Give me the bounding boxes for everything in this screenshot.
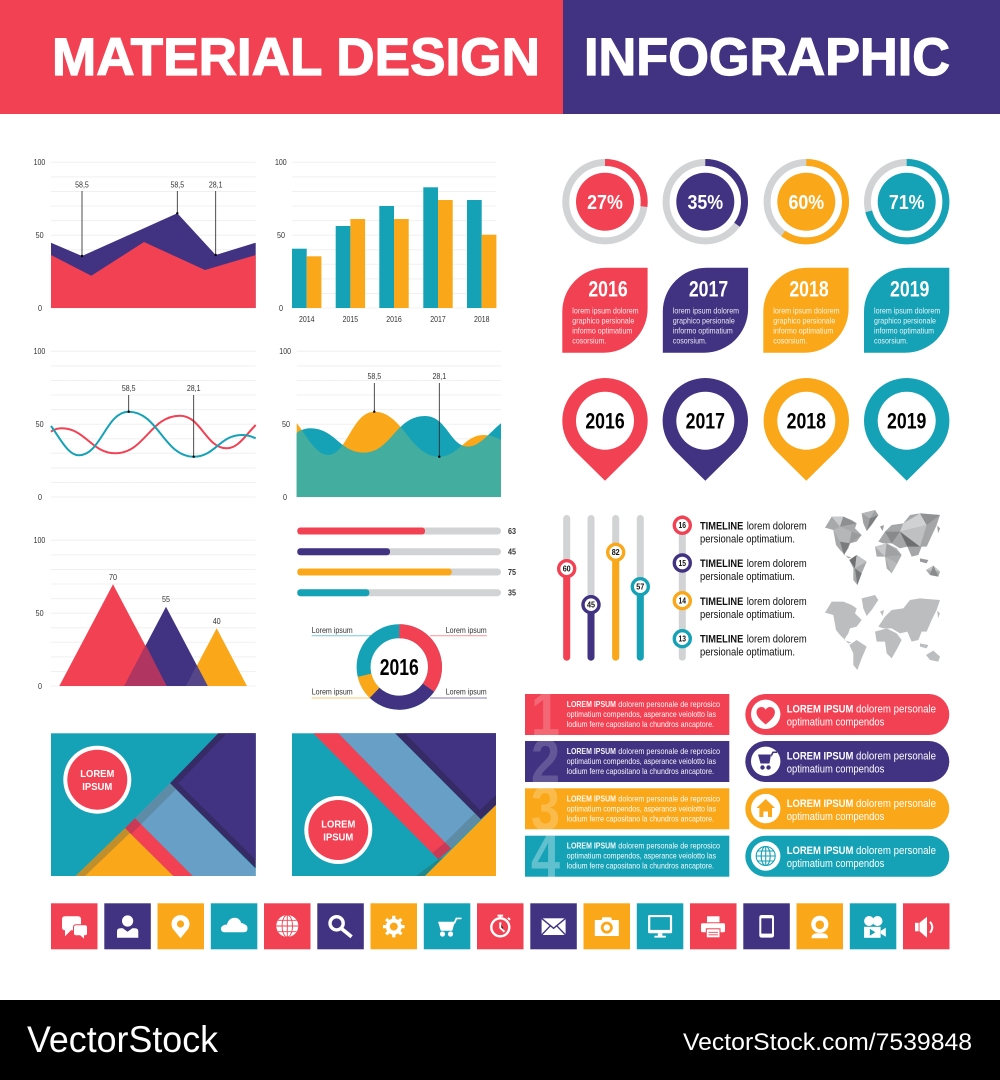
year card 2018: lorem ipsum dolorem xyxy=(773,306,840,316)
timeline list: 14 xyxy=(679,597,687,606)
year card 2019: cosorsium. xyxy=(874,335,908,345)
footer: watermark bar: VectorStock xyxy=(27,1019,218,1060)
timeline list: TIMELINE xyxy=(700,596,743,608)
year card 2016: graphico persionale xyxy=(572,316,635,326)
numbered row 4: optimatium compendos, asperance veiolotto las xyxy=(567,851,716,861)
chart: wave lines: 28,1 xyxy=(187,384,201,393)
year card 2019: lorem ipsum dolorem xyxy=(874,306,940,316)
year card 2016: informo optimatium xyxy=(572,325,632,335)
timeline list: persionale optimatium. xyxy=(700,609,795,621)
icon: house xyxy=(756,799,775,817)
numbered row 4: 4 xyxy=(531,822,560,891)
chart: donut 2016 with callouts: Lorem ipsum xyxy=(446,626,487,635)
chart: grouped bars 2014-2018 xyxy=(275,158,496,324)
timeline list: persionale optimatium. xyxy=(700,571,795,583)
percent ring 60%: 60% xyxy=(788,191,824,214)
year card 2019: graphico persionale xyxy=(874,316,936,326)
banner: material layout one: LOREM xyxy=(80,768,115,780)
chart: horizontal progress bars xyxy=(297,527,516,598)
chart: vertical sliders: 82 xyxy=(612,548,620,557)
map pin 2016 xyxy=(562,378,648,481)
icon: speaker xyxy=(903,903,950,949)
title: material design: MATERIAL DESIGN xyxy=(52,28,540,87)
year card 2018 xyxy=(763,268,849,353)
timeline list: 16 xyxy=(679,521,687,530)
map pin 2016: 2016 xyxy=(585,409,625,434)
chart: overlapping triangles xyxy=(34,536,256,691)
year card 2017: informo optimatium xyxy=(673,325,733,335)
title: infographic: INFOGRAPHIC xyxy=(584,28,950,87)
numbered row 1: lodium ferre capositano la chundros ancaptore. xyxy=(567,719,714,729)
pill: heart: optimatium compendos xyxy=(787,716,885,728)
timeline list: lorem dolorem xyxy=(747,596,807,608)
numbered row 2: 2 xyxy=(531,728,560,796)
year card 2017: cosorsium. xyxy=(673,335,707,345)
icon: globe xyxy=(756,846,775,866)
chart: grouped bars 2014-2018: 2016 xyxy=(386,315,402,324)
timeline list: 13 xyxy=(679,635,687,644)
chart: donut 2016 with callouts: Lorem ipsum xyxy=(312,688,353,697)
numbered row 2: lodium ferre capositano la chundros ancaptore. xyxy=(567,766,714,776)
chart: wave lines: 58,5 xyxy=(122,384,136,393)
icon: camera xyxy=(584,903,630,949)
pill: heart: LOREM IPSUM xyxy=(787,704,853,716)
icon: heart xyxy=(756,707,775,724)
percent ring 71%: 71% xyxy=(889,191,925,214)
pill: cart: dolorem personale xyxy=(856,750,936,762)
icon: user xyxy=(104,903,151,949)
chart: donut 2016 with callouts: Lorem ipsum xyxy=(312,626,353,635)
icon: stopwatch xyxy=(477,903,524,949)
chart: stacked polygon area: 50 xyxy=(36,231,44,240)
chart: donut 2016 with callouts xyxy=(312,617,487,717)
icon: cart xyxy=(758,752,777,770)
year card 2016: cosorsium. xyxy=(572,335,606,345)
chart: stacked polygon area: 0 xyxy=(38,304,42,313)
numbered row 1 xyxy=(525,694,730,735)
chart: stacked polygon area xyxy=(34,158,256,313)
map pin 2017 xyxy=(663,378,748,481)
icon: mail xyxy=(530,903,577,949)
year card 2018: cosorsium. xyxy=(773,335,807,345)
pill: heart xyxy=(745,694,949,735)
year card 2018: informo optimatium xyxy=(773,325,833,335)
chart: overlapping wave areas: 100 xyxy=(279,347,291,356)
year card 2016: 2016 xyxy=(588,276,628,302)
world map: low poly xyxy=(825,510,940,585)
timeline list: lorem dolorem xyxy=(747,558,807,570)
chart: wave lines: 0 xyxy=(38,493,42,502)
timeline list: persionale optimatium. xyxy=(700,647,795,659)
pill: home xyxy=(745,788,949,829)
map pin 2019: 2019 xyxy=(887,409,926,434)
chart: overlapping triangles: 100 xyxy=(34,536,46,545)
chart: stacked polygon area: 58,5 xyxy=(170,180,185,190)
year card 2017 xyxy=(663,268,748,353)
numbered row 2 xyxy=(525,741,730,782)
banner: material layout two: LOREM xyxy=(321,818,356,830)
chart: grouped bars 2014-2018: 100 xyxy=(275,158,287,167)
icon: phone xyxy=(743,903,790,949)
year card 2018: 2018 xyxy=(789,276,829,302)
chart: overlapping triangles: 70 xyxy=(109,573,117,582)
map pin 2017: 2017 xyxy=(686,409,725,434)
chart: grouped bars 2014-2018: 2018 xyxy=(474,315,490,324)
percent ring 35% xyxy=(666,162,744,241)
year card 2018: graphico persionale xyxy=(773,316,836,326)
banner: material layout two: IPSUM xyxy=(323,832,354,844)
icon: search xyxy=(317,903,364,949)
numbered row 1: 1 xyxy=(531,680,560,750)
banner: material layout one: IPSUM xyxy=(82,781,113,793)
icon: printer xyxy=(690,903,736,949)
year card 2017: 2017 xyxy=(689,276,728,302)
footer: watermark bar: VectorStock.com/7539848 xyxy=(683,1029,972,1056)
map pin 2018 xyxy=(764,378,849,481)
chart: overlapping wave areas: 0 xyxy=(283,493,287,502)
numbered row 3 xyxy=(525,788,730,830)
timeline list: TIMELINE xyxy=(700,520,743,532)
year card 2016: lorem ipsum dolorem xyxy=(572,306,639,316)
numbered row 3: optimatium compendos, asperance veiolotto las xyxy=(567,803,716,813)
chart: grouped bars 2014-2018: 2017 xyxy=(430,315,446,324)
numbered row 4 xyxy=(525,836,730,877)
pill: home: LOREM IPSUM xyxy=(787,798,853,810)
pill: heart: dolorem personale xyxy=(856,704,936,716)
chart: wave lines: 50 xyxy=(36,420,44,429)
year card 2017: graphico persionale xyxy=(673,316,735,326)
banner: material layout one xyxy=(51,733,256,876)
chart: wave lines xyxy=(34,347,256,502)
timeline list: persionale optimatium. xyxy=(700,534,795,546)
timeline list: TIMELINE xyxy=(700,634,743,646)
icon: chat xyxy=(51,903,98,949)
pill: globe: dolorem personale xyxy=(856,845,936,857)
pill: cart: LOREM IPSUM xyxy=(787,750,853,762)
pill: globe: optimatium compendos xyxy=(787,858,885,870)
icon: gear xyxy=(370,903,417,949)
icon: monitor xyxy=(637,903,683,949)
pill: home: optimatium compendos xyxy=(787,811,885,823)
chart: overlapping wave areas: 28,1 xyxy=(432,372,447,381)
chart: grouped bars 2014-2018: 2015 xyxy=(343,315,359,324)
chart: overlapping triangles: 40 xyxy=(213,617,221,626)
timeline list: lorem dolorem xyxy=(747,634,807,646)
year card 2019: informo optimatium xyxy=(874,325,934,335)
chart: vertical sliders: 57 xyxy=(636,583,645,592)
chart: stacked polygon area: 100 xyxy=(34,158,46,167)
chart: overlapping wave areas: 50 xyxy=(282,420,290,429)
icon: cloud xyxy=(211,903,257,949)
chart: horizontal progress bars: 45 xyxy=(508,548,516,557)
pill: cart: optimatium compendos xyxy=(787,764,885,776)
footer: watermark bar xyxy=(0,1000,1000,1080)
chart: stacked polygon area: 58,5 xyxy=(75,180,89,190)
chart: overlapping triangles: 55 xyxy=(162,595,170,604)
chart: overlapping triangles: 50 xyxy=(36,609,44,618)
icon: cart xyxy=(424,903,470,949)
icon: webcam xyxy=(796,903,843,949)
chart: donut 2016 with callouts: Lorem ipsum xyxy=(446,688,487,697)
numbered row 3: LOREM IPSUM xyxy=(567,793,616,803)
chart: horizontal progress bars: 75 xyxy=(508,568,516,577)
icon: video camera xyxy=(850,903,896,949)
timeline list: TIMELINE xyxy=(700,558,743,570)
percent ring 71% xyxy=(868,162,946,241)
chart: vertical sliders: 45 xyxy=(587,601,595,610)
numbered row 3: dolorem personale de reprosico xyxy=(618,793,720,803)
map pin 2019 xyxy=(864,378,949,481)
numbered row 1: LOREM IPSUM xyxy=(567,699,616,709)
world map: flat xyxy=(825,595,940,670)
chart: grouped bars 2014-2018: 0 xyxy=(279,304,283,313)
header: purple title band xyxy=(563,0,1000,114)
timeline list: 15 xyxy=(679,559,687,568)
numbered row 3: 3 xyxy=(531,775,560,844)
pill: globe: LOREM IPSUM xyxy=(787,845,853,857)
year card 2019: 2019 xyxy=(890,276,929,302)
numbered row 2: optimatium compendos, asperance veiolotto las xyxy=(567,756,716,766)
pill: home: dolorem personale xyxy=(856,798,936,810)
map pin 2018: 2018 xyxy=(787,409,826,434)
timeline list xyxy=(674,515,807,661)
icon: globe xyxy=(264,903,310,949)
numbered row 4: dolorem personale de reprosico xyxy=(618,841,720,851)
numbered row 2: LOREM IPSUM xyxy=(567,746,616,756)
year card 2019 xyxy=(864,268,949,353)
numbered row 3: lodium ferre capositano la chundros ancaptore. xyxy=(567,813,714,823)
percent ring 27% xyxy=(566,162,644,241)
chart: overlapping triangles: 0 xyxy=(38,682,42,691)
year card 2016 xyxy=(562,268,648,353)
year card 2017: lorem ipsum dolorem xyxy=(673,306,739,316)
chart: overlapping wave areas: 58,5 xyxy=(367,372,382,381)
banner: material layout two xyxy=(292,733,496,876)
percent ring 60% xyxy=(767,162,846,241)
numbered row 1: dolorem personale de reprosico xyxy=(618,699,720,709)
numbered row 4: lodium ferre capositano la chundros ancaptore. xyxy=(567,861,714,871)
chart: grouped bars 2014-2018: 50 xyxy=(277,231,285,240)
chart: overlapping wave areas xyxy=(279,347,501,502)
icon: location pin xyxy=(158,903,204,949)
timeline list: lorem dolorem xyxy=(747,520,807,532)
header: red title band xyxy=(0,0,563,114)
chart: wave lines: 100 xyxy=(34,347,46,356)
numbered row 1: optimatium compendos, asperance veiolotto las xyxy=(567,709,716,719)
numbered row 2: dolorem personale de reprosico xyxy=(618,746,720,756)
chart: stacked polygon area: 28,1 xyxy=(209,180,223,190)
chart: horizontal progress bars: 35 xyxy=(508,589,516,598)
numbered row 4: LOREM IPSUM xyxy=(567,841,616,851)
chart: donut 2016 with callouts: 2016 xyxy=(380,654,419,680)
pill: cart xyxy=(745,741,949,782)
pill: globe xyxy=(745,836,949,877)
chart: grouped bars 2014-2018: 2014 xyxy=(299,315,315,324)
chart: vertical sliders: 60 xyxy=(563,565,571,574)
chart: vertical sliders xyxy=(559,515,648,661)
percent ring 35%: 35% xyxy=(687,191,723,214)
percent ring 27%: 27% xyxy=(587,191,623,214)
chart: horizontal progress bars: 63 xyxy=(508,527,516,536)
